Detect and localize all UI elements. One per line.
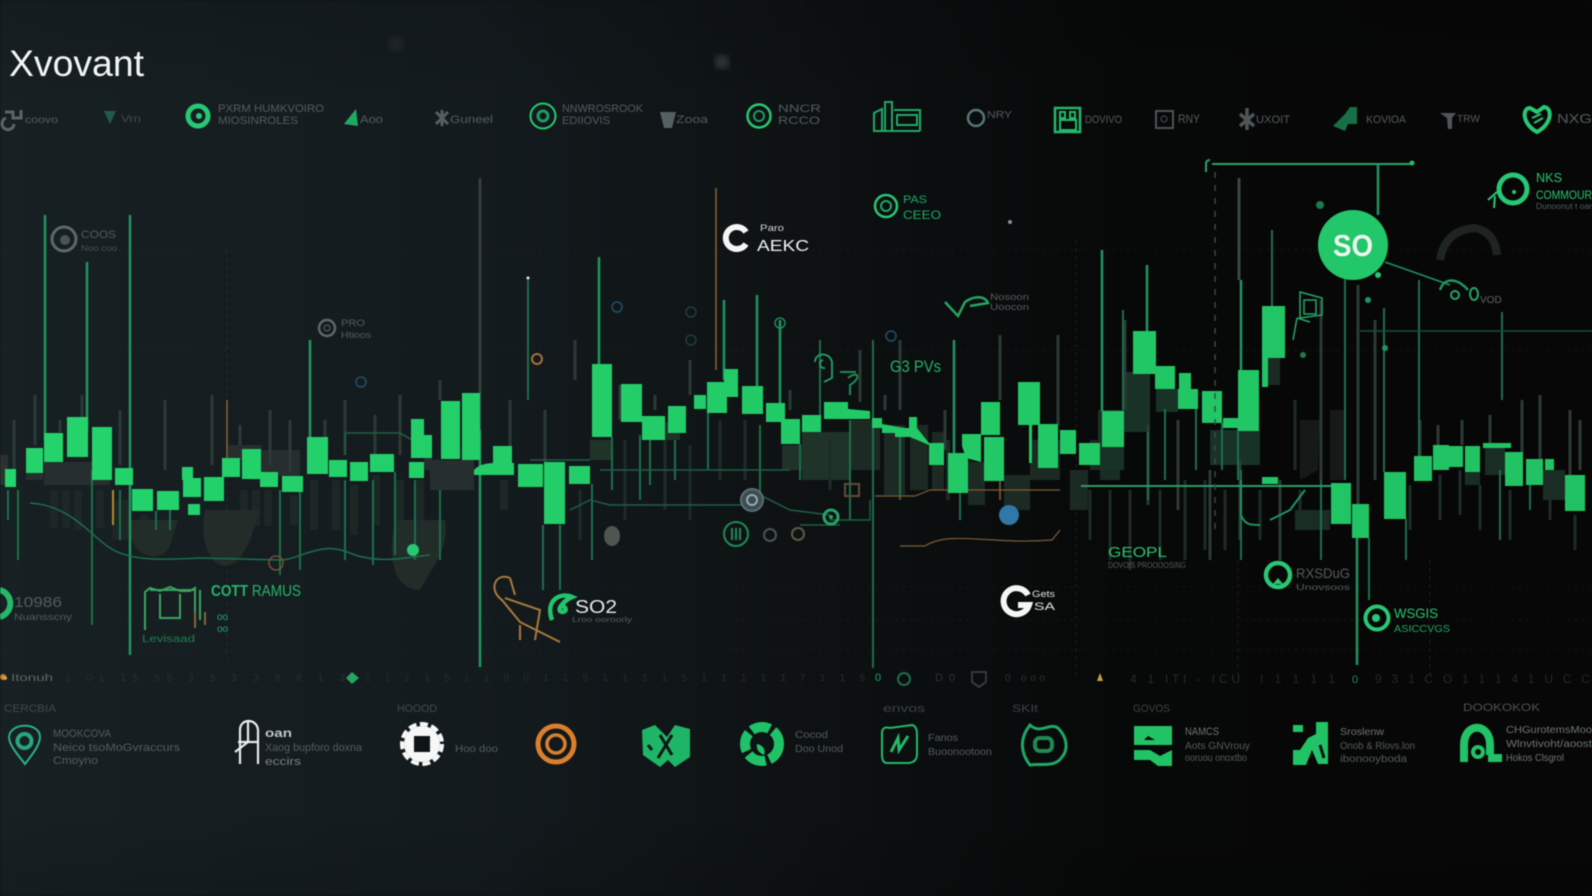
callout: white C ring: AEKC: [757, 238, 809, 255]
bottom item 6: green segmented ring: Cocod: [795, 730, 828, 741]
top item 1: coovo: [25, 115, 59, 126]
callout: green chart icon with COTT RAMUS: oo: [217, 624, 229, 635]
annotation cluster right of badge: VOD: [1480, 295, 1502, 306]
bottom item 1: pin: [4, 703, 181, 767]
bottom item 7: green outline card: envos: [883, 703, 926, 715]
bottom item 9: green block: ooruou onoxtbo: [1185, 753, 1247, 764]
top item 8: [748, 103, 821, 128]
chart: dim lower stems: [8, 340, 1530, 668]
bottom item 1: pin: CERCBIA: [4, 703, 57, 715]
bottom item 10: green glyph: ibonooyboda: [1340, 754, 1408, 765]
top item 14: [1333, 107, 1407, 131]
bottom row: [4, 702, 1592, 768]
top item 15: [1440, 113, 1481, 129]
top item 14: KOVIOA: [1366, 114, 1407, 126]
callout: green squiggle label: [945, 292, 1029, 316]
top item 1: [2, 110, 59, 130]
faint tick row: I 1 1 1 1: [1260, 672, 1335, 686]
top item 3: MIOSINROLES: [218, 115, 298, 127]
faint tick row: 1 1 1 1 5 1 1 0 0 1 1 5 1 1 1 1 5 1 1 1 1 1 7 1 1 5: [365, 673, 865, 684]
faint tick row: [0, 672, 1590, 687]
callout: left partial ring 10986: [0, 590, 73, 622]
callout: green chart icon with COTT RAMUS: [142, 583, 301, 645]
bottom item 3: white gear: [397, 703, 498, 764]
callout: orange squiggle and swirl SO2: SO2: [575, 597, 617, 617]
faint tick row: 4 1 ITI - ICU: [1130, 672, 1240, 686]
callout: green ring middle right: RXSDuG: [1296, 565, 1350, 581]
bottom item 2: white glyph: Xaog bupforo doxna: [265, 742, 363, 754]
top item 12: RNY: [1178, 112, 1200, 126]
bottom item 7: green outline card: [882, 703, 992, 763]
top item 7: Zooa: [676, 114, 709, 126]
bottom item 9: green block: NAMCS: [1185, 726, 1219, 738]
top item 16: heart icon: NXG: [1557, 111, 1592, 126]
bottom item 8: green outline blob: SKIt: [1012, 703, 1038, 715]
bottom item 7: green outline card: Fanos: [928, 733, 958, 744]
bottom item 1: pin: MOOKCOVA: [53, 728, 112, 740]
bottom item 10: green glyph: [1293, 722, 1415, 765]
top item 10: [968, 110, 1012, 126]
bottom item 10: green glyph: Sroslenw: [1340, 727, 1385, 738]
callout: orange squiggle and swirl SO2: [494, 577, 633, 642]
callout: left grey ring: COOS: [81, 229, 116, 241]
top item 6: NNWROSROOK: [562, 103, 644, 115]
chart: ghost clutter strokes: [560, 400, 1575, 570]
callout: green ring label: [875, 194, 941, 222]
faint tick row: 0 ooo: [1005, 673, 1045, 684]
top item 7: [660, 112, 709, 128]
chart: green candlesticks: [5, 306, 1585, 538]
top item 6: EDIIOVIS: [562, 115, 610, 127]
chart background: dark ghost blocks below the candles: [0, 358, 1565, 590]
callout: top right ring: Dunoonut t oar: [1536, 202, 1592, 211]
callout: white G ring: Gets: [1032, 589, 1056, 599]
top item 10: NRY: [987, 110, 1012, 121]
top item 5: [436, 110, 493, 126]
callout: top right ring: NKS: [1536, 170, 1562, 185]
bottom item 10: green glyph: Onob & Rlovs.lon: [1340, 741, 1415, 752]
bottom item 3: white gear: HOOOD: [397, 703, 437, 715]
callout: green ring label: CEEO: [903, 208, 941, 222]
top item 11: [1055, 108, 1122, 132]
big green badge: [1318, 210, 1388, 280]
faint tick row: 0: [875, 672, 881, 684]
callout: green ring middle right: Unovsoos: [1296, 583, 1350, 592]
annotation cluster right of badge: [1293, 228, 1502, 358]
faint tick row: Itonuh: [11, 673, 53, 684]
bottom item 11: green arch: DOOKOKOK: [1463, 702, 1541, 714]
bottom item 1: pin: Neico tsoMoGvraccurs: [53, 742, 181, 754]
big green badge: SO: [1333, 228, 1373, 263]
callout: green ring WSGIS: ASICCVGS: [1394, 624, 1450, 635]
bottom item 11: green arch: CHGurotemsMoo: [1506, 725, 1592, 736]
bottom item 1: pin: Cmoyno: [53, 755, 98, 767]
bottom item 6: green segmented ring: Doo Unod: [795, 744, 843, 755]
top item 13: [1240, 108, 1290, 130]
bottom item 4: orange ring: [538, 726, 574, 762]
callout: G3 PVs with coil icons: G3 PVs: [890, 357, 941, 376]
top item 16: heart icon: [1525, 107, 1592, 132]
top item 2: [104, 111, 141, 125]
callout: green chart icon with COTT RAMUS: oo: [217, 612, 229, 623]
callout: green chart icon with COTT RAMUS: Levisaad: [142, 634, 195, 645]
bottom item 9: green block: GOVOS: [1133, 703, 1170, 715]
top item 8: RCCO: [778, 115, 821, 127]
callout: green squiggle label: Uoocon: [990, 302, 1029, 312]
top item 2: Vrn: [121, 114, 141, 125]
callout: green squiggle label: Nosoon: [990, 292, 1029, 302]
faint tick row: 0: [1352, 674, 1358, 686]
top item 13: UXOIT: [1256, 114, 1290, 126]
faint tick row: D 0: [935, 672, 955, 684]
callout: left grey ring: [52, 227, 118, 253]
callout: green ring middle right: [1266, 563, 1350, 592]
callout: green ring WSGIS: [1366, 605, 1450, 635]
callout: green chart icon with COTT RAMUS: COTT RAMUS: [211, 583, 301, 600]
callout: white G ring: [1004, 588, 1056, 614]
top item 5: Guneel: [450, 114, 493, 126]
bottom item 6: green segmented ring: [745, 727, 843, 761]
top item 15: TRW: [1457, 114, 1481, 125]
callout: GEOPL: DOVOIS PROOOOSING: [1108, 561, 1186, 570]
top item 9: building icon: [873, 102, 920, 131]
bottom item 11: green arch: Hokos Clsgrol: [1506, 753, 1564, 764]
callout: top right ring: [1488, 170, 1592, 211]
bottom item 5: green blob: [642, 725, 690, 767]
bottom item 9: green block: Aots GNVrouy: [1185, 741, 1250, 752]
callout: GEOPL: GEOPL: [1108, 544, 1167, 561]
callout: white C ring: Paro: [760, 223, 784, 233]
scattered node markers: [269, 220, 1019, 570]
bottom item 11: green arch: [1463, 702, 1592, 764]
top item 4: Aoo: [360, 114, 383, 126]
callout: left partial ring 10986: Nuansscny: [14, 612, 73, 622]
callout: green ring label: PAS: [903, 194, 927, 206]
callout: small grey ring: [319, 318, 372, 340]
top item 3: [188, 103, 324, 127]
title: Xvovant: [9, 43, 145, 84]
top item 4: [344, 109, 383, 126]
bottom item 9: green block: [1133, 703, 1250, 766]
callout: white C ring: [726, 223, 809, 255]
chart: bright green wicks: [30, 164, 1592, 667]
bottom item 11: green arch: Wlnvtivoht/aoost: [1506, 739, 1592, 750]
faint tick row: 1 01 15 55 3 5 3 3 8 8 1 3: [65, 673, 345, 684]
top item 12: [1156, 111, 1200, 128]
bottom item 8: green outline blob: [1012, 703, 1066, 765]
bottom item 3: white gear: Hoo doo: [455, 744, 498, 755]
top item 8: NNCR: [778, 103, 821, 115]
top icon row: [2, 102, 1592, 132]
callout: G3 PVs with coil icons: [815, 354, 941, 395]
top item 11: DOVIVO: [1085, 114, 1122, 126]
callout: GEOPL: [1108, 544, 1186, 570]
bottom item 2: white glyph: [235, 721, 363, 768]
callout: white G ring: SA: [1034, 601, 1056, 613]
bottom item 7: green outline card: Buoonootoon: [928, 747, 992, 758]
callout: left partial ring 10986: 10986: [14, 594, 62, 611]
chart: grey wicks: [14, 285, 1580, 560]
callout: small grey ring: Htioos: [341, 330, 372, 340]
callout: orange squiggle and swirl SO2: Lroo ooroorly: [572, 617, 633, 624]
top item 3: PXRM HUMKVOIRO: [218, 103, 324, 115]
top item 6: [530, 103, 644, 128]
faint tick row: 9 3 1 C O 1 1 1 4 1 U C C: [1375, 672, 1590, 686]
callout: left grey ring: Noo coo: [81, 244, 118, 253]
bottom item 2: white glyph: eccirs: [265, 756, 302, 768]
bottom item 2: white glyph: oan: [265, 726, 292, 740]
bracket connector to big badge: [1206, 160, 1414, 530]
callout: small grey ring: PRO: [341, 318, 365, 328]
callout: green ring WSGIS: WSGIS: [1394, 605, 1438, 621]
